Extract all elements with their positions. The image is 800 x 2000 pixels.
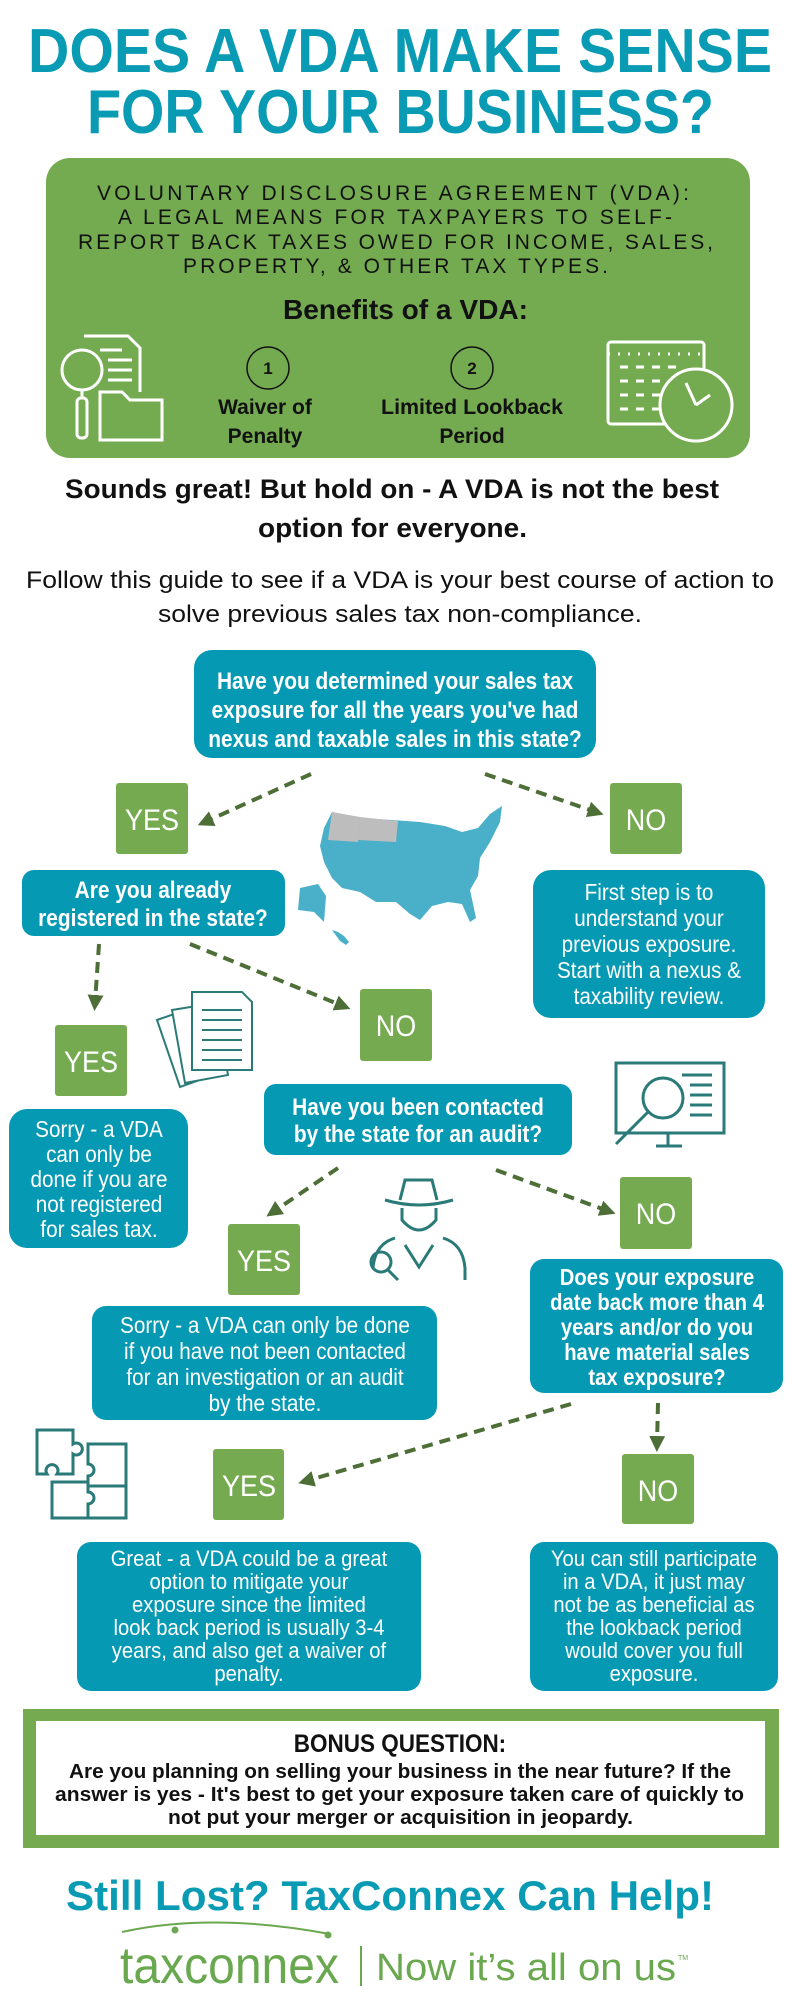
text: sounds great: [65, 474, 719, 543]
text: follow guide: Follow this guide to see if a VDA is your best course of action to: [26, 567, 774, 594]
answer: sorry audit: by the state.: [209, 1390, 321, 1416]
benefit 2: Period: [439, 425, 505, 448]
benefit 1: Penalty: [228, 425, 303, 448]
yes box 1: YES: [125, 804, 179, 837]
benefit 1: 1: [263, 359, 273, 378]
text: sounds great: option for everyone.: [258, 513, 527, 543]
question 2: Are you already: [75, 877, 232, 903]
arrow: q1 to no: [485, 774, 596, 812]
arrow: q3 to yes: [273, 1168, 338, 1212]
answer: sorry registered: for sales tax.: [40, 1216, 158, 1242]
logo: Now it’s all on us: [376, 1947, 676, 1989]
yes box 2: [55, 1025, 127, 1096]
answer: great: [77, 1542, 421, 1691]
text: sounds great: Sounds great! But hold on - A VDA is not the best: [65, 474, 719, 504]
answer: great: Great - a VDA could be a great: [111, 1547, 387, 1571]
icon: calendar with clock: [608, 342, 732, 441]
title: [28, 17, 772, 147]
no box 1: [610, 783, 682, 854]
yes box 2: YES: [64, 1046, 118, 1079]
answer: great: look back period is usually 3-4: [114, 1616, 385, 1640]
answer: still participate: exposure.: [610, 1662, 698, 1686]
logo: [120, 1922, 688, 1995]
no box 2: [360, 989, 432, 1061]
answer: great: penalty.: [214, 1662, 284, 1686]
icon: folder with magnifier: [62, 336, 162, 440]
answer: sorry registered: [9, 1109, 188, 1248]
logo: TM: [678, 1955, 688, 1962]
arrow: q4 to yes: [306, 1404, 571, 1481]
no box 3: [620, 1177, 692, 1249]
definition text: VOLUNTARY DISCLOSURE AGREEMENT (VDA):: [97, 182, 689, 205]
answer: great: option to mitigate your: [149, 1570, 349, 1594]
answer: sorry registered: can only be: [46, 1141, 152, 1167]
question 1: nexus and taxable sales in this state?: [208, 726, 582, 752]
yes box 3: [228, 1224, 300, 1295]
benefit 2: Limited Lookback: [381, 396, 563, 419]
answer: first step: [533, 870, 765, 1018]
icon: detective: [371, 1180, 465, 1280]
answer: sorry audit: if you have not been contacted: [124, 1338, 406, 1364]
no box 3: NO: [636, 1198, 676, 1231]
no box 4: NO: [638, 1475, 678, 1508]
bonus question panel: not put your merger or acquisition in jeopardy.: [168, 1807, 633, 1829]
yes box 3: YES: [237, 1245, 291, 1278]
no box 1: NO: [626, 804, 666, 837]
logo: taxconnex: [120, 1937, 339, 1995]
arrow: q2 to yes: [95, 944, 99, 1003]
arrow: q3 to no: [496, 1170, 608, 1211]
question 4: Does your exposure: [560, 1264, 754, 1290]
yes box 4: YES: [222, 1470, 276, 1503]
icon: documents: [157, 992, 252, 1087]
answer: great: years, and also get a waiver of: [112, 1639, 386, 1663]
question 3: by the state for an audit?: [294, 1121, 542, 1147]
question 4: [530, 1259, 783, 1393]
answer: great: exposure since the limited: [132, 1593, 366, 1617]
benefits heading: Benefits of a VDA:: [283, 294, 528, 325]
question 3: Have you been contacted: [292, 1094, 544, 1120]
text: follow guide: solve previous sales tax non-compliance.: [158, 601, 642, 628]
question 2: [22, 870, 285, 936]
title: FOR YOUR BUSINESS?: [87, 78, 714, 147]
question 4: years and/or do you: [561, 1314, 753, 1340]
icon: monitor magnifier: [616, 1063, 724, 1146]
answer: sorry registered: done if you are: [31, 1166, 167, 1192]
answer: first step: previous exposure.: [562, 931, 736, 957]
yes box 4: [213, 1449, 284, 1520]
benefit 1: Waiver of: [218, 396, 313, 419]
definition text: A LEGAL MEANS FOR TAXPAYERS TO SELF-: [118, 206, 672, 229]
bonus question panel: BONUS QUESTION:: [294, 1730, 506, 1758]
benefit 2: 2: [467, 359, 477, 378]
answer: sorry audit: for an investigation or an audit: [126, 1364, 404, 1390]
bonus question panel: Are you planning on selling your business in the near future? If the: [69, 1761, 731, 1783]
no box 2: NO: [376, 1010, 416, 1043]
answer: still participate: in a VDA, it just may: [563, 1570, 745, 1594]
answer: sorry audit: Sorry - a VDA can only be done: [120, 1312, 410, 1338]
answer: sorry audit: [92, 1306, 437, 1420]
answer: still participate: not be as beneficial as: [553, 1593, 755, 1617]
bonus question panel: [23, 1709, 779, 1848]
answer: first step: understand your: [574, 905, 724, 931]
bonus question panel: answer is yes - It's best to get your exposure taken care of quickly to: [55, 1784, 744, 1806]
question 1: exposure for all the years you've had: [212, 697, 578, 723]
no box 4: [622, 1454, 694, 1524]
question 3: [264, 1084, 572, 1155]
answer: still participate: [530, 1542, 778, 1691]
arrow: q4 to no: [657, 1403, 658, 1444]
icon: US map: [298, 806, 502, 945]
benefit 2: [381, 347, 563, 448]
question 4: date back more than 4: [550, 1289, 764, 1315]
answer: still participate: the lookback period: [566, 1616, 742, 1640]
text: follow guide: [26, 567, 774, 628]
answer: still participate: You can still participate: [551, 1547, 757, 1571]
call to action: Still Lost? TaxConnex Can Help!: [66, 1872, 714, 1919]
definition text: PROPERTY, & OTHER TAX TYPES.: [183, 255, 608, 278]
question 4: tax exposure?: [588, 1364, 726, 1390]
yes box 1: [116, 783, 188, 854]
answer: sorry registered: not registered: [36, 1191, 162, 1217]
question 1: [194, 650, 596, 758]
arrow: q1 to yes: [205, 774, 311, 822]
question 4: have material sales: [564, 1339, 750, 1365]
benefit 1: [218, 347, 313, 448]
definition text: [78, 182, 713, 278]
panel: VDA definition: [46, 158, 750, 458]
answer: first step: Start with a nexus &: [557, 957, 741, 983]
question 2: registered in the state?: [38, 905, 268, 931]
answer: sorry registered: Sorry - a VDA: [35, 1116, 163, 1142]
definition text: REPORT BACK TAXES OWED FOR INCOME, SALES,: [78, 231, 713, 254]
arrow: q2 to no: [190, 944, 343, 1006]
answer: first step: taxability review.: [574, 983, 724, 1009]
icon: puzzle: [37, 1430, 126, 1518]
answer: first step: First step is to: [585, 879, 713, 905]
question 1: Have you determined your sales tax: [217, 668, 574, 694]
answer: still participate: would cover you full: [564, 1639, 743, 1663]
